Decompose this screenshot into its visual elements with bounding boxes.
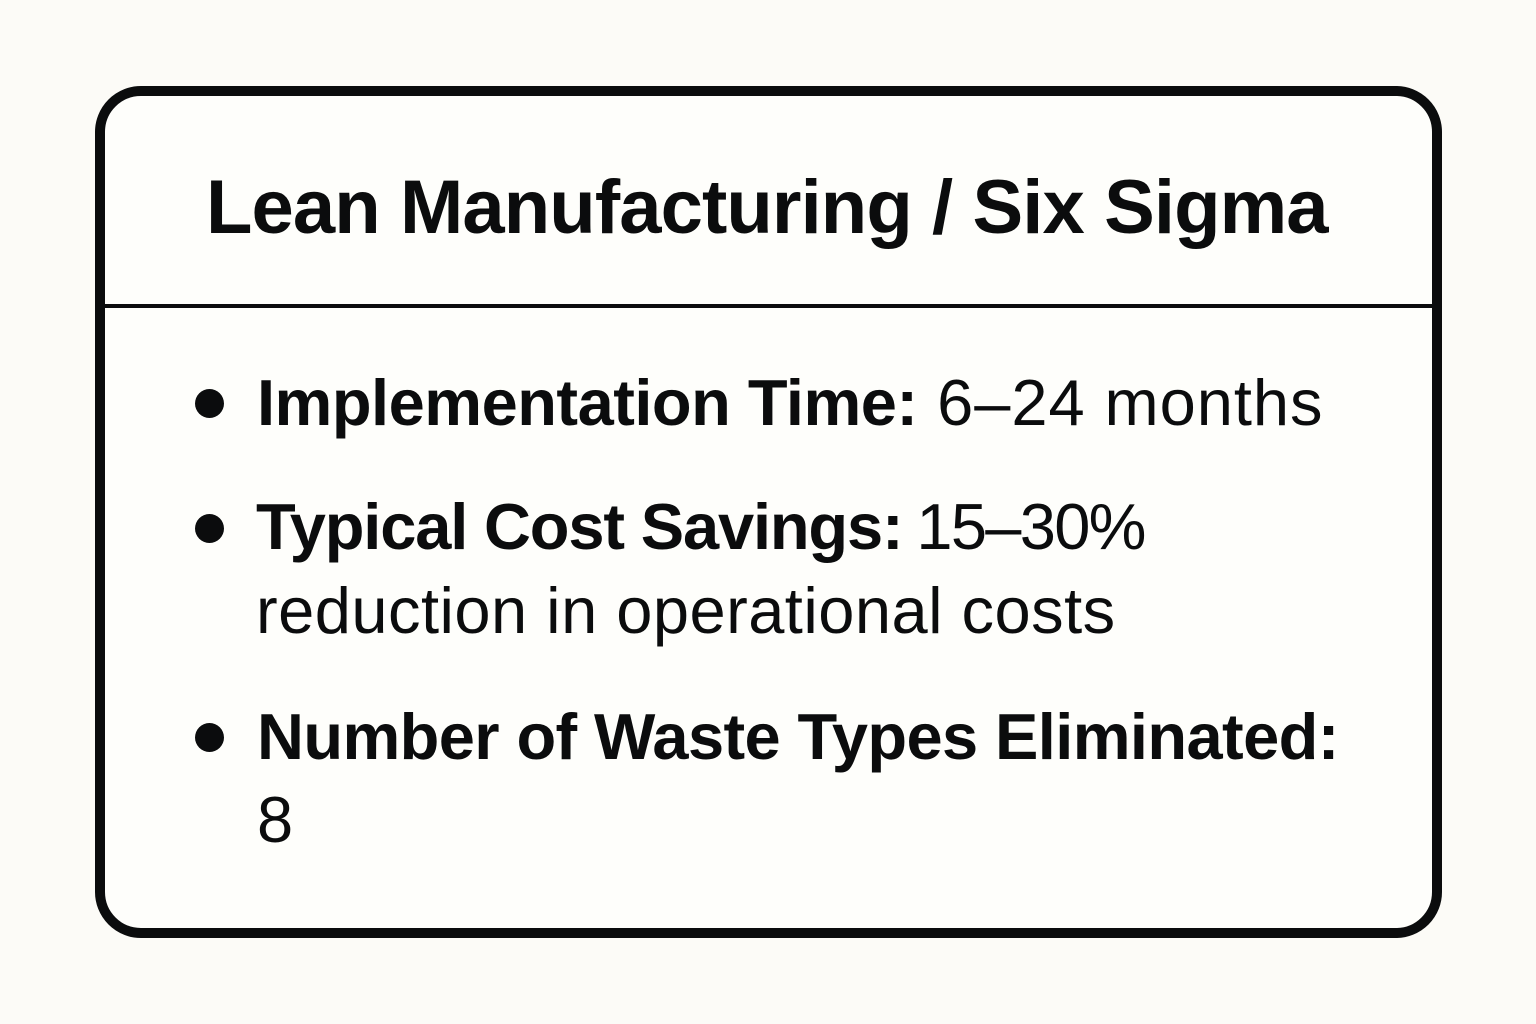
bullet dot 3 <box>195 723 224 752</box>
bullet dot 2 <box>195 514 224 543</box>
bullet text 3 <box>257 700 1339 856</box>
panel: card <box>95 86 1442 938</box>
divider <box>104 304 1433 308</box>
title: Lean Manufacturing / Six Sigma <box>206 165 1328 250</box>
bullet text 3: Number of Waste Types Eliminated: <box>257 700 1339 773</box>
bullet 1 <box>195 366 1323 439</box>
bullet 2 <box>195 490 1145 647</box>
bullet text 2 <box>256 490 1145 647</box>
bullet text 2: reduction in operational costs <box>256 574 1116 647</box>
bullet text 1: Implementation Time: 6–24 months <box>257 366 1323 439</box>
bullet text 2: Typical Cost Savings: 15–30% <box>256 490 1145 563</box>
bullet text 3: 8 <box>257 783 293 856</box>
bullet dot 1 <box>195 389 224 418</box>
bullet 3 <box>195 700 1339 856</box>
